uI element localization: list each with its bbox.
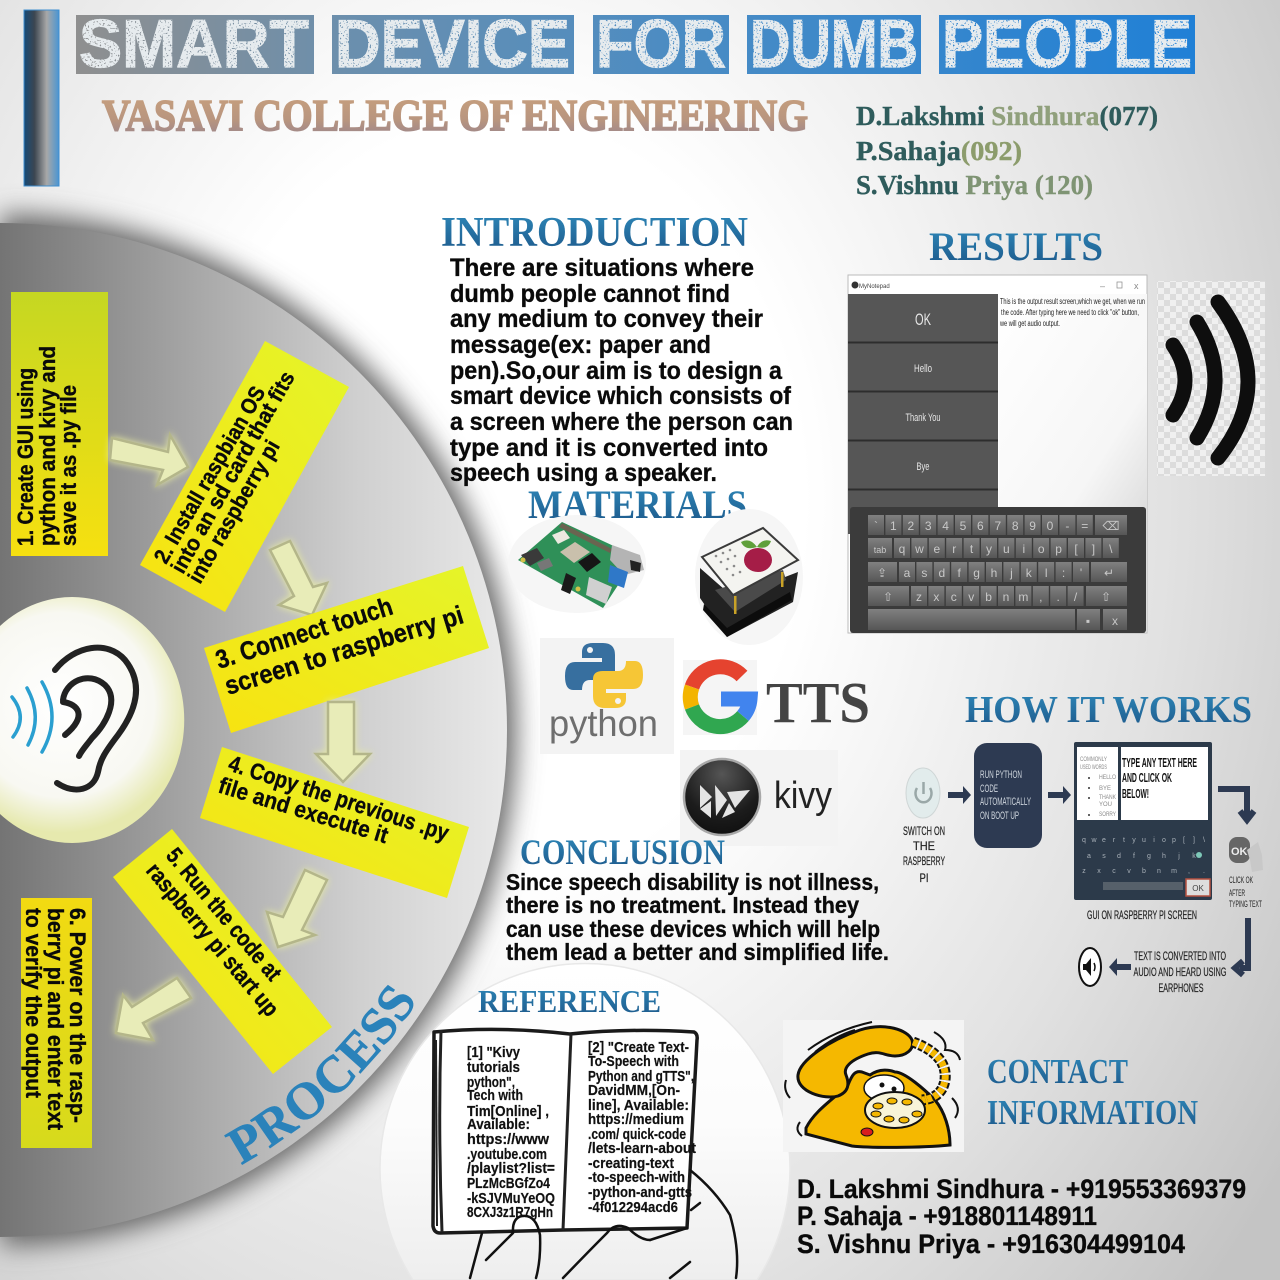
flow step: GUI screen: BYE: [1099, 786, 1111, 792]
introduction text: a screen where the person can: [450, 408, 793, 436]
arrow: screen to click ok: [1218, 789, 1254, 820]
step 5 box: raspberry pi start up: [141, 858, 285, 1021]
title: smart device for dumb people: FOR: [596, 6, 726, 82]
logo: python: python: [549, 703, 658, 744]
step 1 box: save it as .py file: [56, 385, 81, 546]
flow step: run python code: CODE: [980, 783, 998, 795]
heading: introduction: INTRODUCTION: [441, 210, 748, 256]
step 3 box: 3. Connect touch: [212, 591, 396, 675]
title: smart device for dumb people: [76, 6, 1195, 82]
conclusion text: can use these devices which will help: [506, 916, 880, 942]
step 5 box: [113, 829, 332, 1074]
flow step: click ok: AFTER: [1229, 888, 1245, 898]
results screenshot: on-screen keyboard: asdfghjkl:': [904, 566, 1082, 580]
arrow: run to screen: [1048, 786, 1071, 804]
introduction text: message(ex: paper and: [450, 331, 711, 359]
reference 2 text: /lets-learn-about: [588, 1140, 696, 1157]
flow step: audio output text: EARPHONES: [1158, 981, 1204, 995]
arrow: step 3 to 4: [316, 702, 370, 782]
heading: reference: REFERENCE: [478, 983, 661, 1019]
flow step: GUI screen: asdfghjk: [1087, 853, 1196, 860]
team member names: D.Lakshmi Sindhura(077): [856, 101, 1158, 131]
reference 1 text: Available:: [467, 1116, 530, 1133]
step 6 box: berry pi and enter text: [43, 908, 68, 1131]
arrow: step 4 to 5: [267, 870, 327, 947]
step 3 box: screen to raspberry pi: [221, 600, 467, 701]
title: smart device for dumb people: SMART: [79, 6, 309, 82]
icon: speaker: [1079, 948, 1101, 986]
results screenshot: application window: the code. After typing here we need to click "ok" button,: [1001, 308, 1139, 317]
conclusion text: Since speech disability is not illness,: [506, 869, 879, 895]
step 6 box: [21, 898, 92, 1148]
illustration: ringing yellow telephone: [783, 1020, 964, 1152]
reference 1 text: .youtube.com: [467, 1146, 547, 1163]
image: raspberry pi board: [508, 515, 646, 613]
flow step: GUI screen: [1074, 742, 1212, 900]
title: smart device for dumb people: DEVICE: [335, 6, 570, 82]
step 2 box: into an sd card that fits: [166, 367, 300, 577]
introduction text: [450, 254, 793, 487]
flow step: GUI screen: BELOW!: [1122, 787, 1149, 801]
reference 2 text: -python-and-gtts: [588, 1184, 692, 1201]
contact details: [797, 1174, 1246, 1259]
flow step: GUI screen: qwertyuiop[]\: [1082, 837, 1205, 844]
results screenshot: application window: we will get audio output.: [999, 319, 1060, 328]
heading: conclusion: CONCLUSION: [520, 832, 725, 872]
reference 1 text: [1] "Kivy: [467, 1044, 521, 1061]
logo: kivy: [680, 750, 838, 846]
conclusion text: there is no treatment. Instead they: [506, 892, 859, 918]
results screenshot: application window: MyNotepad: [859, 284, 890, 290]
reference 1 text: PLzMcBGfZo4: [467, 1175, 551, 1192]
results screenshot: on-screen keyboard: ⌫: [1103, 519, 1120, 533]
results screenshot: on-screen keyboard: ⇧: [1101, 590, 1111, 604]
logo: python: [540, 638, 674, 754]
flow step: run python code: [974, 743, 1042, 848]
flow step: GUI screen: SORRY: [1099, 812, 1116, 818]
flow step: switch on: [903, 768, 945, 885]
step 1 box: 1. Create GUI using: [13, 368, 38, 546]
step 4 box: [200, 747, 469, 898]
team member names: P.Sahaja(092): [856, 136, 1022, 166]
step 6 box: to verify the output: [21, 908, 46, 1099]
reference 1 text: /playlist?list=: [467, 1160, 555, 1177]
disc shadow: [0, 214, 516, 1246]
reference 2 text: To-Speech with: [588, 1053, 679, 1070]
step 2 box: into raspberry pi: [183, 436, 285, 588]
arrow: step 5 to 6: [116, 978, 191, 1040]
step 2 box: 2. Install raspbian OS: [149, 382, 270, 568]
team member names: [856, 101, 1158, 200]
heading: materials: MATERIALS: [528, 482, 747, 527]
heading: how it works: HOW IT WORKS: [965, 689, 1252, 731]
flow step: switch on: RASPBERRY: [903, 854, 945, 868]
results screenshot: application window: Hello: [914, 363, 932, 375]
flow step: GUI screen: zxcvbnm,.: [1082, 868, 1205, 875]
flow step: GUI screen: TYPE ANY TEXT HERE: [1122, 756, 1197, 770]
flow step: click ok: [1229, 837, 1263, 909]
flow step: switch on: THE: [913, 839, 935, 853]
results screenshot: application window: Bye: [916, 461, 930, 473]
step 4 box: 4. Copy the previous .py: [225, 750, 452, 846]
introduction text: pen).So,our aim is to design a: [450, 357, 783, 385]
conclusion text: [506, 869, 889, 965]
flow step: GUI screen: OK: [1192, 884, 1204, 893]
results screenshot: on-screen keyboard: qwertyuiop[]\: [899, 542, 1113, 556]
illustration: open book held in hands: [433, 1029, 737, 1278]
arrow: audio to speaker: [1109, 958, 1131, 976]
flow step: audio output text: [1134, 949, 1226, 995]
heading: contact information: INFORMATION: [987, 1093, 1198, 1132]
results screenshot: on-screen keyboard: ⇪: [877, 566, 887, 580]
heading: contact information: CONTACT: [987, 1052, 1128, 1091]
results screenshot: on-screen keyboard: `1234567890-=: [874, 519, 1088, 533]
reference 2 text: -4f012294acd6: [588, 1199, 678, 1216]
step 3 box: [204, 566, 489, 733]
reference 1 text: 8CXJ3z1R7gHn: [467, 1204, 553, 1221]
flow step: GUI screen: YOU: [1099, 802, 1112, 808]
icon: ear in glowing circle: [0, 597, 184, 843]
results screenshot: application window: Thank You: [906, 412, 940, 424]
reference 1 text: Tim[Online] ,: [467, 1103, 549, 1120]
results screenshot: application window: This is the output result screen,which we get, when we run: [1000, 297, 1145, 306]
reference 1 text: -kSJVMuYeOQ: [467, 1190, 555, 1207]
icon: sound waves on checkerboard: [1157, 281, 1265, 476]
panel: reference backdrop circle: [380, 963, 790, 1280]
panel: process disc: [0, 223, 507, 1237]
flow step: GUI screen: AND CLICK OK: [1122, 771, 1172, 785]
contact details: P. Sahaja - +918801148911: [797, 1201, 1097, 1231]
flow step: GUI screen: USED WORDS: [1080, 765, 1107, 771]
flow step: run python code: AUTOMATICALLY: [980, 796, 1031, 808]
flow step: click ok: OK: [1231, 846, 1248, 858]
contact details: S. Vishnu Priya - +916304499104: [797, 1229, 1185, 1259]
step 1 box: python and kivy and: [35, 346, 60, 546]
image: raspberry pi touchscreen stack: [695, 509, 803, 645]
heading: results: RESULTS: [929, 224, 1103, 269]
results screenshot: on-screen keyboard: tab: [874, 545, 886, 555]
college name: VASAVI COLLEGE OF ENGINEERING: [102, 91, 808, 140]
step 1 box: [11, 292, 108, 556]
reference 2 text: -creating-text: [588, 1155, 674, 1172]
flow step: click ok: CLICK OK: [1229, 875, 1253, 885]
results screenshot: on-screen keyboard: ▪: [1086, 614, 1090, 628]
results screenshot: application window: [848, 275, 1147, 633]
reference 2 text: .com/ quick-code: [588, 1126, 686, 1143]
results screenshot: on-screen keyboard: ↵: [1104, 566, 1114, 580]
flow step: switch on: PI: [920, 871, 928, 885]
reference 1 text: tutorials: [467, 1059, 520, 1076]
results screenshot: on-screen keyboard: zxcvbnm,./: [916, 590, 1078, 604]
results screenshot: application window: OK: [915, 310, 931, 329]
team member names: S.Vishnu Priya (120): [856, 170, 1093, 200]
arrow: click ok to audio: [1235, 918, 1248, 975]
heading: process: PROCESS: [224, 984, 414, 1165]
reference 2 text: DavidMM,[On-: [588, 1082, 680, 1099]
results screenshot: on-screen keyboard: [850, 507, 1146, 633]
heading: contact information: [987, 1052, 1198, 1132]
left accent bar: [24, 10, 59, 186]
reference 2 text: Python and gTTS",: [588, 1068, 694, 1085]
conclusion text: them lead a better and simplified life.: [506, 939, 889, 965]
results screenshot: application window: x: [1134, 281, 1139, 291]
reference 1 text: https://www: [467, 1131, 549, 1148]
flow step: switch on: SWITCH ON: [903, 824, 945, 838]
flow step: run python code: RUN PYTHON: [980, 769, 1022, 781]
reference 2 text: [2] "Create Text-: [588, 1039, 689, 1056]
introduction text: dumb people cannot find: [450, 280, 730, 308]
step 5 box: 5. Run the code at: [161, 843, 287, 986]
logo: google G: [683, 660, 757, 735]
title: smart device for dumb people: DUMB: [750, 6, 918, 82]
reference 2 text: line], Available:: [588, 1097, 689, 1114]
arrow: step 1 to 2: [110, 435, 188, 485]
reference 1 text: Tech with: [467, 1087, 523, 1104]
logo: kivy: kivy: [774, 775, 832, 817]
arrow: step 2 to 3: [270, 541, 327, 615]
flow step: GUI screen: COMMONLY: [1080, 757, 1107, 763]
step 4 box: file and execute it: [216, 772, 392, 848]
flow step: GUI screen: THANK: [1099, 795, 1116, 801]
results screenshot: application window: –: [1100, 281, 1105, 291]
results screenshot: on-screen keyboard: ⇧: [883, 590, 893, 604]
reference 1 text: python",: [467, 1074, 515, 1091]
step 2 box: [140, 341, 349, 612]
reference 2 text: [588, 1039, 696, 1216]
introduction text: type and it is converted into: [450, 434, 768, 462]
flow step: GUI screen: HELLO: [1099, 775, 1116, 781]
caption: GUI on raspberry pi screen: GUI ON RASPBERRY PI SCREEN: [1087, 908, 1197, 922]
arrow: switch to run: [948, 786, 971, 804]
results screenshot: on-screen keyboard: x: [1112, 614, 1118, 628]
introduction text: There are situations where: [450, 254, 754, 282]
reference 2 text: -to-speech-with: [588, 1169, 685, 1186]
title: smart device for dumb people: PEOPLE: [942, 6, 1192, 82]
step 6 box: 6. Power on the rasp-: [65, 908, 90, 1123]
contact details: D. Lakshmi Sindhura - +919553369379: [797, 1174, 1246, 1204]
introduction text: any medium to convey their: [450, 305, 763, 333]
reference 2 text: https://medium: [588, 1111, 684, 1128]
flow step: run python code: ON BOOT UP: [980, 810, 1019, 822]
introduction text: speech using a speaker.: [450, 459, 717, 487]
label: TTS: TTS: [766, 670, 870, 735]
introduction text: smart device which consists of: [450, 382, 792, 410]
reference 1 text: [467, 1044, 555, 1221]
